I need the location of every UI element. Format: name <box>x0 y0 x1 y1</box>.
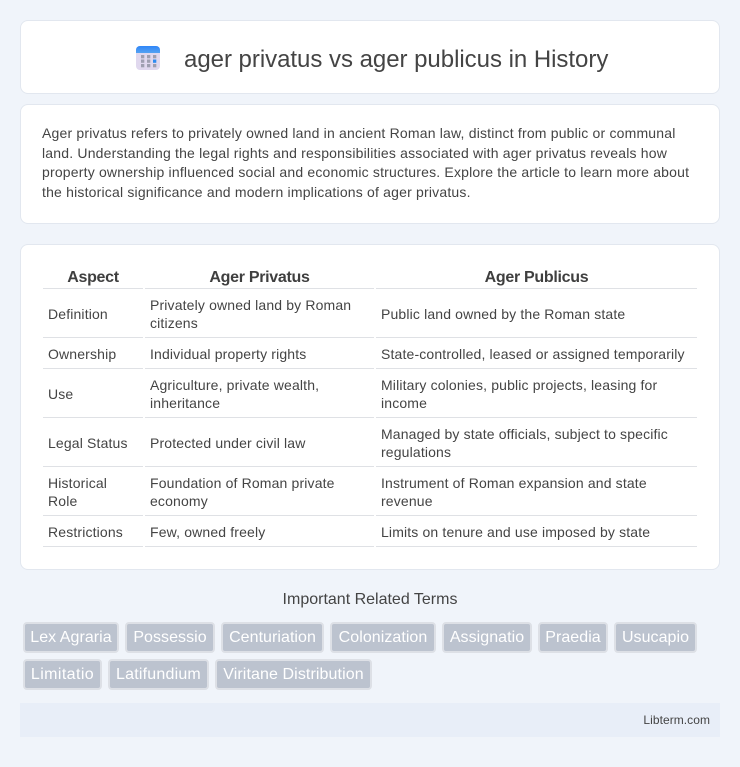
table header: Ager Publicus <box>485 269 588 286</box>
row: legal status: Managed by state officials, subject to specific <box>381 426 668 442</box>
row: use: Military colonies, public projects, leasing for <box>381 377 657 393</box>
row: historical role: Instrument of Roman expansion and state <box>381 475 647 491</box>
intro text: land. Understanding the legal rights and responsibilities associated with ager privatus reveals how <box>42 144 667 160</box>
row: ownership <box>48 346 685 362</box>
intro text <box>42 125 689 200</box>
row: restrictions: Limits on tenure and use imposed by state <box>381 524 650 540</box>
related terms tags: Limitatio <box>31 666 94 683</box>
footer bar <box>20 703 720 737</box>
related terms tags: Centuriation <box>229 629 316 646</box>
row: use: income <box>381 395 427 411</box>
row: legal status <box>48 426 668 460</box>
row: legal status: Legal Status <box>48 435 128 451</box>
title card <box>20 20 720 94</box>
icon: calendar <box>136 46 160 70</box>
related terms tags: Praedia <box>545 629 601 646</box>
title: ager privatus vs ager publicus in History <box>184 46 608 73</box>
row: ownership: Ownership <box>48 346 116 362</box>
related terms tags: Viritane Distribution <box>223 666 364 683</box>
row: historical role: Role <box>48 493 77 509</box>
comparison table <box>43 269 697 547</box>
row: use: Agriculture, private wealth, <box>150 377 319 393</box>
row: use: inheritance <box>150 395 220 411</box>
row: legal status: Protected under civil law <box>150 435 306 451</box>
footer source: Libterm.com <box>643 713 710 727</box>
row: historical role: revenue <box>381 493 433 509</box>
row: legal status: regulations <box>381 444 451 460</box>
row: historical role: Foundation of Roman private <box>150 475 335 491</box>
related terms tags <box>23 622 697 690</box>
row: definition: Public land owned by the Roman state <box>381 306 625 322</box>
row: definition: Definition <box>48 306 108 322</box>
intro text panel <box>20 104 720 224</box>
row: ownership: State-controlled, leased or assigned temporarily <box>381 346 685 362</box>
related terms tags: Colonization <box>339 629 427 646</box>
related terms tags: Possessio <box>133 629 207 646</box>
row: definition <box>48 297 625 331</box>
intro text: the historical significance and modern implications of ager privatus. <box>42 184 471 200</box>
row: definition: citizens <box>150 315 198 331</box>
related terms tags: Assignatio <box>450 629 524 646</box>
row: definition: Privately owned land by Roman <box>150 297 351 313</box>
row: restrictions: Restrictions <box>48 524 123 540</box>
row: restrictions: Few, owned freely <box>150 524 265 540</box>
related terms tags: Latifundium <box>116 666 201 683</box>
related terms tags: Usucapio <box>622 629 689 646</box>
intro text: property ownership influenced social and economic structures. Explore the article to learn more about <box>42 164 689 180</box>
related terms tags: Lex Agraria <box>30 629 112 646</box>
related terms heading: Important Related Terms <box>283 591 457 608</box>
row: historical role: Historical <box>48 475 107 491</box>
row: restrictions <box>48 524 650 540</box>
row: historical role: economy <box>150 493 208 509</box>
row: ownership: Individual property rights <box>150 346 306 362</box>
intro text: Ager privatus refers to privately owned land in ancient Roman law, distinct from public or communal <box>42 125 676 141</box>
table header: Aspect <box>67 269 119 286</box>
row: use <box>48 377 657 411</box>
comparison table panel <box>20 244 720 570</box>
row: historical role <box>48 475 647 509</box>
table header <box>67 269 588 286</box>
table header: Ager Privatus <box>209 269 310 286</box>
row: use: Use <box>48 386 73 402</box>
